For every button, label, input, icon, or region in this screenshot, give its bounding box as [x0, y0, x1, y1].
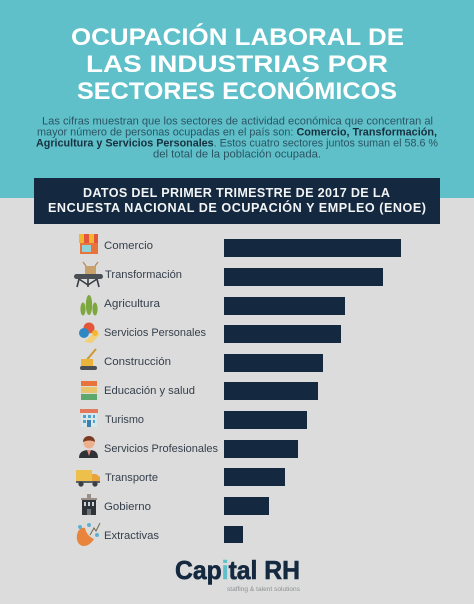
- intro text block: Agricultura y Servicios Personales . Estos cuatro sectores juntos suman el 58.6 %: [36, 138, 439, 150]
- icon: agricultura: [80, 295, 98, 316]
- sector labels: Servicios Profesionales: [104, 443, 218, 455]
- sector labels: Gobierno: [104, 501, 151, 513]
- sector labels: Transformación: [105, 269, 182, 281]
- title: LAS INDUSTRIAS POR: [86, 51, 388, 78]
- banner heading text: [48, 186, 426, 215]
- sector labels: Transporte: [105, 472, 158, 484]
- icon: servicios profesionales: [79, 436, 98, 458]
- title: [71, 23, 404, 105]
- banner heading text: ENCUESTA NACIONAL DE OCUPACIÓN Y EMPLEO (ENOE): [48, 200, 426, 215]
- logo tagline: staffing & talent solutions: [227, 586, 301, 593]
- intro text block: del total de la población ocupada.: [153, 148, 321, 160]
- icon: turismo: [80, 409, 98, 427]
- bar chart: [224, 239, 401, 543]
- intro text block: [36, 116, 439, 160]
- icon: transporte: [76, 470, 100, 487]
- sector labels: Comercio: [104, 240, 153, 252]
- icon: construccion: [80, 349, 97, 370]
- icon: extractivas: [77, 523, 100, 546]
- icon: transformacion: [74, 262, 103, 287]
- sector labels: Turismo: [105, 414, 144, 426]
- sector labels: Construcción: [104, 356, 171, 368]
- icon: servicios personales: [79, 322, 100, 343]
- panel: dark heading banner: [34, 178, 440, 224]
- banner heading text: DATOS DEL PRIMER TRIMESTRE DE 2017 DE LA: [83, 186, 390, 200]
- intro text block: mayor número de personas ocupadas en el país son: Comercio, Transformación,: [37, 126, 437, 138]
- icon: gobierno: [81, 494, 97, 515]
- icon: comercio: [79, 234, 98, 254]
- sector labels: [104, 240, 218, 542]
- logo: Capital RH: Capital RH: [175, 555, 300, 585]
- sector labels: Extractivas: [104, 530, 159, 542]
- sector labels: Servicios Personales: [104, 327, 206, 339]
- icon: educacion y salud: [81, 381, 97, 400]
- title: OCUPACIÓN LABORAL DE: [71, 23, 404, 51]
- panel: teal header background: [0, 0, 474, 198]
- intro text block: Las cifras muestran que los sectores de actividad económica que concentran al: [42, 116, 433, 128]
- title: SECTORES ECONÓMICOS: [77, 77, 397, 105]
- sector labels: Agricultura: [104, 298, 161, 310]
- sector labels: Educación y salud: [104, 385, 195, 397]
